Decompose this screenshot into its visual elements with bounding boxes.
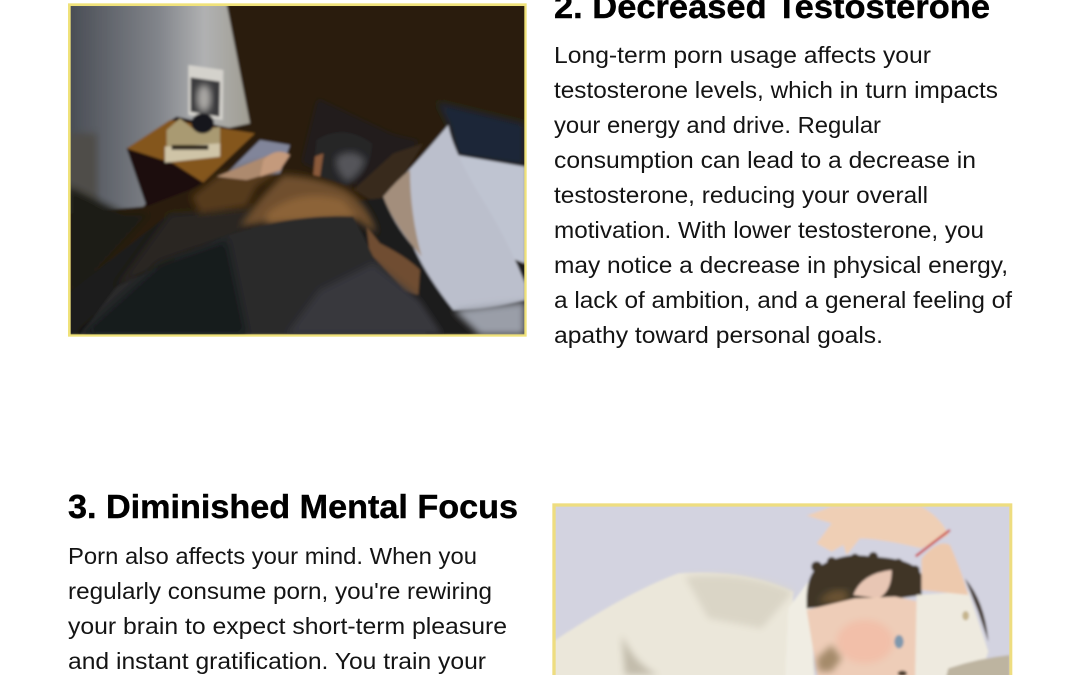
photo: curly-haired man lying on his side with a hand over his head [552,503,1012,675]
text block: section 2 body: a lack of ambition, and a general feeling of [554,287,1013,313]
text block: section 2 body [554,42,1013,348]
text block: section 3 body: regularly consume porn, you're rewiring [68,578,492,604]
photo: man lying in a dark bedroom [68,3,527,337]
text block: section 3 body: Porn also affects your mind. When you [68,543,477,569]
photo frame [68,3,527,337]
heading: 3. Diminished Mental Focus: 3. Diminished Mental Focus [68,488,518,525]
text block: section 3 body: and instant gratification. You train your [68,648,486,674]
text block: section 2 body: your energy and drive. Regular [554,112,881,138]
text block: section 2 body: motivation. With lower testosterone, you [554,217,984,243]
text block: section 3 body: your brain to expect short-term pleasure [68,613,507,639]
text block: section 2 body: testosterone, reducing your overall [554,182,928,208]
text block: section 2 body: may notice a decrease in physical energy, [554,252,1008,278]
text block: section 3 body [68,543,507,674]
text block: section 2 body: Long-term porn usage affects your [554,42,931,68]
text block: section 2 body: apathy toward personal goals. [554,322,883,348]
photo frame [552,503,1012,675]
text block: section 2 body: testosterone levels, which in turn impacts [554,77,998,103]
text block: section 2 body: consumption can lead to a decrease in [554,147,976,173]
